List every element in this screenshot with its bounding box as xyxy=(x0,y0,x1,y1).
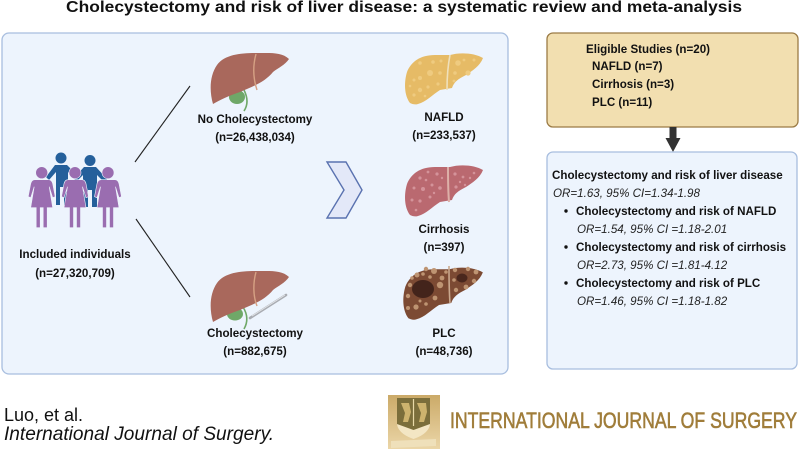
label: no cholecystectomy xyxy=(198,113,313,144)
label: PLC: (n=48,736) xyxy=(415,345,473,358)
arrow line: to no cholecystectomy xyxy=(135,86,190,162)
icon: journal crest xyxy=(388,395,440,449)
icon: cirrhosis liver xyxy=(405,165,483,216)
heading: overall result: Cholecystectomy and risk of liver disease xyxy=(552,169,783,182)
panel: eligible studies xyxy=(547,33,798,127)
label: PLC: PLC xyxy=(432,327,456,340)
label: cirrhosis: Cirrhosis xyxy=(419,223,469,236)
result: PLC: OR=1.46, 95% CI =1.18-1.82 xyxy=(577,295,728,308)
label: cholecystectomy: (n=882,675) xyxy=(223,345,287,358)
label: cholecystectomy xyxy=(207,327,304,358)
result: NAFLD: OR=1.54, 95% CI =1.18-2.01 xyxy=(577,223,727,236)
icon: PLC liver xyxy=(403,266,483,320)
icon: NAFLD liver xyxy=(405,53,483,104)
result: PLC xyxy=(564,277,761,308)
arrow line: to cholecystectomy xyxy=(136,219,190,297)
result: NAFLD xyxy=(564,205,776,236)
label: cirrhosis xyxy=(419,223,469,254)
label: no cholecystectomy: No Cholecystectomy xyxy=(198,113,313,126)
panel: eligible studies: NAFLD (n=7) xyxy=(592,60,663,73)
label: cirrhosis: (n=397) xyxy=(424,241,465,254)
heading: overall result: OR=1.63, 95% CI=1.34-1.98 xyxy=(553,187,701,200)
arrow: chevron xyxy=(327,162,362,218)
icon: liver without cholecystectomy xyxy=(211,53,289,111)
panel: study population and outcomes xyxy=(2,33,508,374)
label: NAFLD: (n=233,537) xyxy=(412,129,476,142)
panel: eligible studies: PLC (n=11) xyxy=(592,96,652,109)
arrow: studies to results xyxy=(666,127,680,152)
label: included individuals: (n=27,320,709) xyxy=(35,267,115,280)
icon: group of people xyxy=(28,152,122,228)
label: no cholecystectomy: (n=26,438,034) xyxy=(215,131,295,144)
result: PLC: Cholecystectomy and risk of PLC xyxy=(576,277,761,290)
result: NAFLD: Cholecystectomy and risk of NAFLD xyxy=(576,205,776,218)
panel: eligible studies: Eligible Studies (n=20) xyxy=(586,43,710,56)
label: PLC xyxy=(415,327,473,358)
label: NAFLD xyxy=(412,111,476,142)
label: included individuals: Included individuals xyxy=(19,248,131,261)
panel: results xyxy=(547,152,797,369)
citation: Luo, et al. xyxy=(4,405,83,425)
label: cholecystectomy: Cholecystectomy xyxy=(207,327,304,340)
label: included individuals xyxy=(19,248,131,280)
citation: International Journal of Surgery. xyxy=(4,424,274,445)
result: cirrhosis: OR=2.73, 95% CI =1.81-4.12 xyxy=(577,259,728,272)
heading: overall result xyxy=(552,169,783,200)
icon: liver with cholecystectomy and instrument xyxy=(211,271,289,329)
result: cirrhosis xyxy=(564,241,786,272)
result: cirrhosis: Cholecystectomy and risk of cirrhosis xyxy=(576,241,786,254)
citation xyxy=(4,405,274,445)
label: NAFLD: NAFLD xyxy=(424,111,464,124)
panel: eligible studies: Cirrhosis (n=3) xyxy=(592,78,674,91)
